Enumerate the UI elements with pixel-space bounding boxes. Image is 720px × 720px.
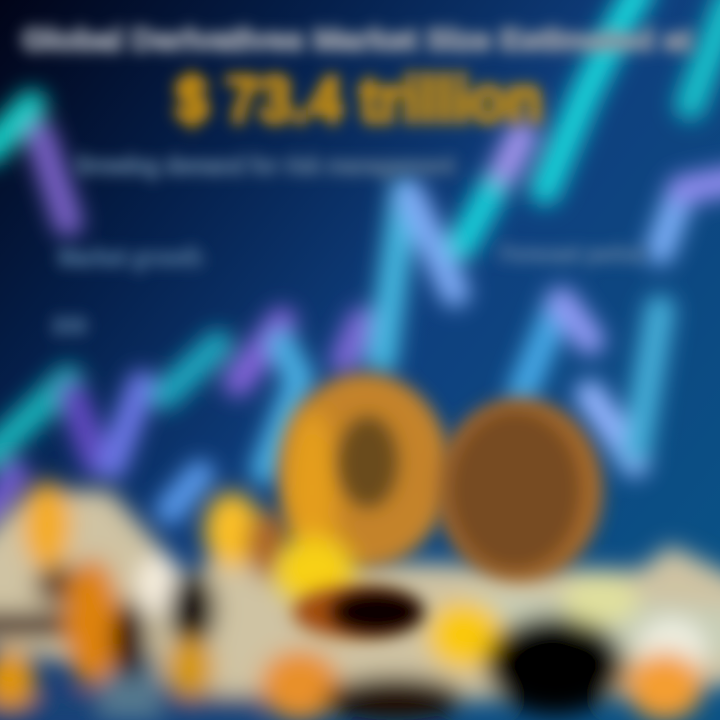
pile of coins <box>0 481 720 720</box>
text block left: Market growth <box>58 242 203 272</box>
text block right: Forecast period <box>500 241 645 268</box>
title: Global Derivatives Market Size Estimated at <box>22 22 692 57</box>
text block left <box>52 242 203 340</box>
coin: rear brown <box>437 398 603 582</box>
subtitle: Growing demand for risk management <box>75 150 455 180</box>
line chart <box>0 0 720 515</box>
coin: front gold <box>275 373 450 638</box>
headline figure: $ 73.4 trillion <box>175 62 543 136</box>
text block left: 2030 <box>52 313 87 340</box>
